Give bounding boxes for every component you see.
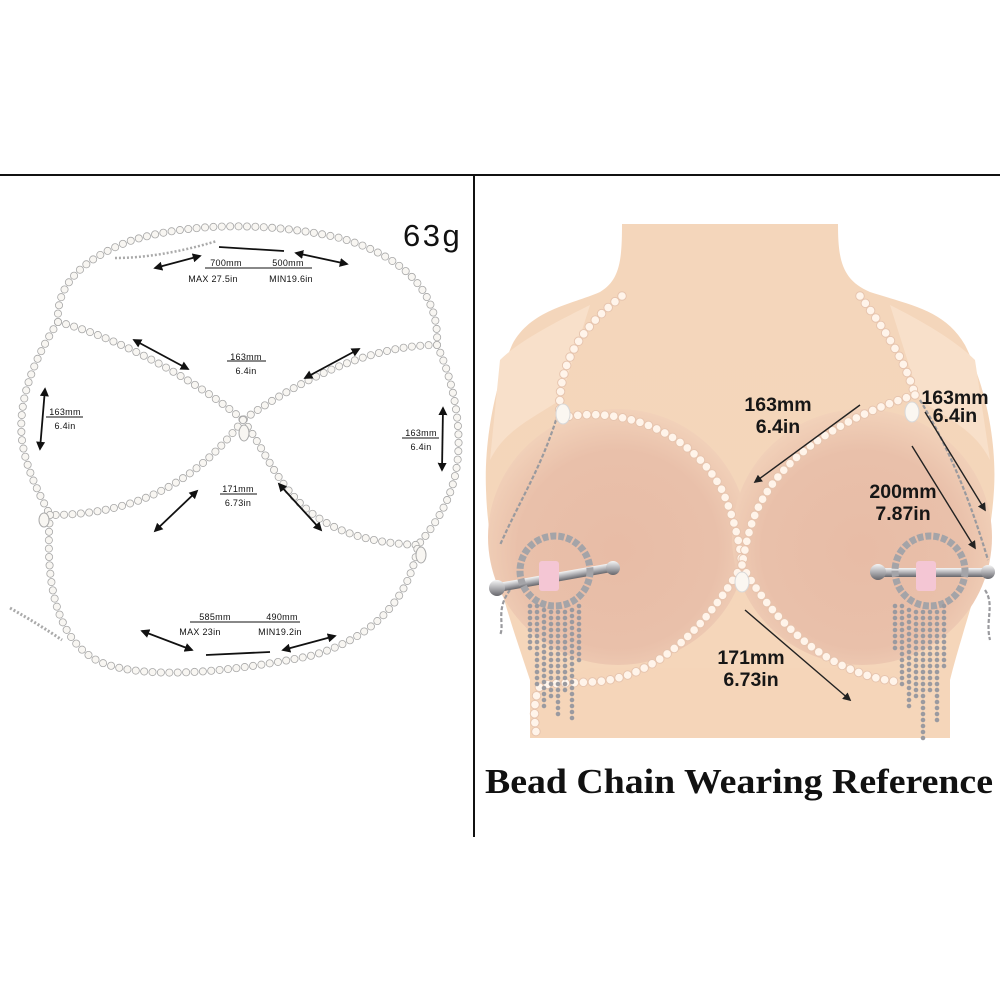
top length dimension — [155, 247, 347, 284]
dimension: 163mm center: 6.4in — [756, 416, 800, 438]
right form — [732, 409, 992, 665]
left side dimension — [40, 389, 83, 449]
dimension: 163mm side: 6.4in — [933, 405, 977, 427]
dimension: 200mm: 200mm — [869, 481, 937, 503]
dimension: 163mm side — [921, 387, 989, 510]
pearl drops — [39, 425, 426, 563]
left ring and barbell — [489, 536, 620, 606]
left form — [488, 409, 748, 665]
pearl chain — [535, 296, 915, 732]
left side dimension: 163mm — [49, 407, 81, 417]
top length dimension: 500mm — [272, 258, 304, 268]
dimension: 171mm: 6.73in — [723, 669, 779, 691]
weight label: 63g — [403, 218, 462, 253]
dimension: 171mm: 171mm — [717, 647, 785, 669]
dimension: 200mm: 7.87in — [875, 503, 931, 525]
lower cross dimension: 171mm — [222, 484, 254, 494]
horizontal divider — [0, 174, 1000, 176]
pearl drops — [556, 402, 919, 592]
dimension: 163mm center — [744, 394, 860, 482]
left side dimension: 6.4in — [54, 421, 76, 431]
vertical divider — [473, 175, 475, 837]
lower band shading — [530, 668, 890, 738]
top length dimension: 700mm — [210, 258, 242, 268]
top length dimension: MAX 27.5in — [188, 274, 238, 284]
right side dimension: 6.4in — [410, 442, 432, 452]
dimension: 171mm — [717, 610, 850, 700]
right side dimension: 163mm — [405, 428, 437, 438]
right ring and barbell — [870, 536, 995, 606]
mannequin torso — [486, 224, 994, 738]
lower cross dimension: 6.73in — [225, 498, 251, 508]
upper cross dimension — [134, 340, 359, 378]
panel: flat-lay bead chain — [10, 218, 462, 673]
title: wearing reference: Bead Chain Wearing Reference — [485, 762, 993, 801]
top length dimension: MIN19.6in — [269, 274, 313, 284]
bottom length dimension: MAX 23in — [179, 627, 221, 637]
bottom length dimension: 585mm — [199, 612, 231, 622]
dimension: 163mm center: 163mm — [744, 394, 812, 416]
panel: mannequin wearing reference — [486, 224, 995, 742]
shoulder shading — [490, 305, 990, 460]
dimension: 163mm side: 163mm — [921, 387, 989, 409]
bottom length dimension: MIN19.2in — [258, 627, 302, 637]
bottom length dimension — [142, 612, 335, 655]
upper cross dimension: 6.4in — [235, 366, 257, 376]
right tassel — [895, 606, 944, 742]
dimension: 200mm — [869, 446, 975, 548]
lower cross dimension — [155, 484, 321, 531]
right side dimension — [402, 408, 443, 470]
bead chain outline — [10, 226, 459, 673]
left tassel — [530, 606, 579, 722]
side chains — [500, 400, 990, 640]
bottom length dimension: 490mm — [266, 612, 298, 622]
upper cross dimension: 163mm — [230, 352, 262, 362]
